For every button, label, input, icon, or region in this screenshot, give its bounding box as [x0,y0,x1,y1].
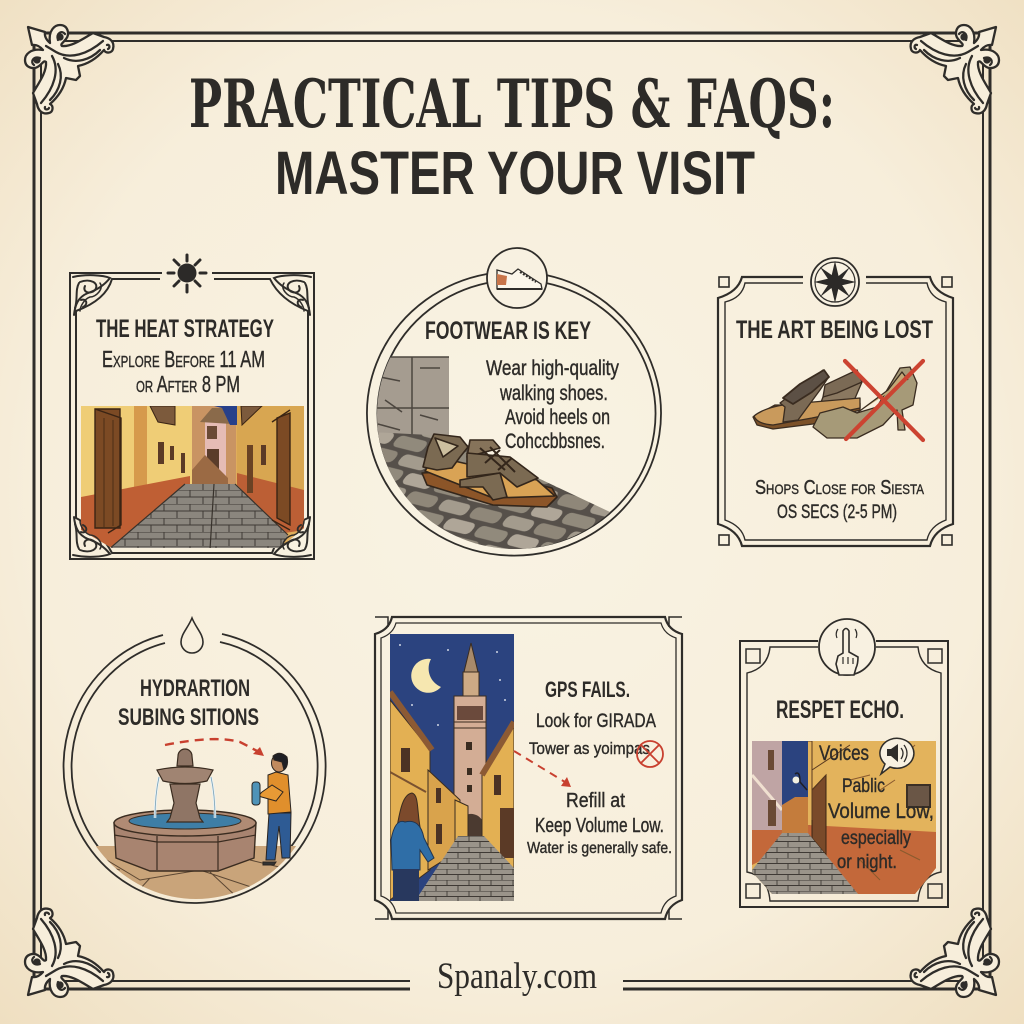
heading: FOOTWEAR IS KEY [425,317,591,345]
text: footwear advice [486,357,619,453]
text: keep voices low: especially [841,828,911,849]
text: footwear advice: Wear high-quality [486,357,619,380]
arrow: red dashed [165,739,264,756]
panel: gps fails [375,617,682,919]
icon: sneaker [487,248,547,308]
arrow: red dashed [514,751,571,787]
panel: the heat strategy [70,255,314,559]
text: look for tower [529,711,656,758]
corner ornament: bottom right [911,909,999,997]
icon: sun [168,255,206,292]
heading: HYDRARTION [140,675,250,702]
corner ornament: top right [911,25,999,113]
title [189,65,835,207]
illustration: sandal [422,434,557,507]
icon: water drop [181,618,203,653]
corner ornament: top left [25,25,113,113]
text: explore times [102,346,265,397]
text: footwear advice: Avoid heels on [505,406,610,429]
panel: hydration [64,618,330,903]
panel frame [70,273,314,559]
heading: THE HEAT STRATEGY [96,315,274,343]
text: refill advice: Keep Volume Low. [535,815,664,837]
text: refill advice: Refill at [566,790,625,812]
corner scrolls [73,275,311,557]
text: refill advice: Water is generally safe. [527,840,672,857]
illustration: stone wall and cobbles [377,356,610,549]
text: keep voices low: Voices [819,742,869,765]
panel: the art being lost [718,258,953,546]
panel frame [718,277,953,546]
illustration: sunny alley [81,406,304,550]
text: siesta hours [755,477,925,523]
circular frame [367,274,661,556]
text: siesta hours: OS SECS (2-5 PM) [777,502,897,523]
illustration: fountain [96,748,296,899]
panel: footwear is key [367,248,661,570]
text: siesta hours: Shops Close for Siesta [755,477,925,499]
text: keep voices low: or night. [837,852,897,873]
panel: respect echo [740,619,948,907]
icon: red prohibition [637,741,663,767]
text: keep voices low: Pablic [842,776,885,797]
text: explore times: or After 8 PM [136,371,240,397]
panel frame [740,641,948,907]
text: keep voices low: Volume Low, [828,800,934,823]
illustration: quiet street [752,741,936,894]
heading: SUBING SITIONS [118,704,259,731]
corner ornament: bottom left [25,909,113,997]
icon: compass [811,258,859,306]
illustration: sandal and heel crossed out [753,367,917,438]
text: look for tower: Tower as yoimpas [529,739,650,758]
icon: finger to lips [819,619,875,675]
text: explore times: Explore Before 11 AM [102,346,265,372]
title: MASTER YOUR VISIT [275,139,755,207]
text: footwear advice: Cohccbbsnes. [505,430,605,453]
footer site name: Spanaly.com [437,956,597,997]
red cross [845,361,923,440]
speech bubble: sound icon [880,738,914,774]
heading: GPS FAILS. [545,677,630,702]
panel frame [375,617,682,919]
illustration: giralda tower at night [390,634,514,902]
text: keep voices low [819,742,934,873]
heading: THE ART BEING LOST [736,316,933,344]
circular frame [64,634,326,903]
illustration: person with bottle [252,753,291,865]
text: footwear advice: walking shoes. [499,382,608,405]
text: refill advice [527,790,672,857]
heading: RESPET ECHO. [776,696,904,724]
heading [118,675,259,731]
text: look for tower: Look for GIRADA [536,711,656,732]
